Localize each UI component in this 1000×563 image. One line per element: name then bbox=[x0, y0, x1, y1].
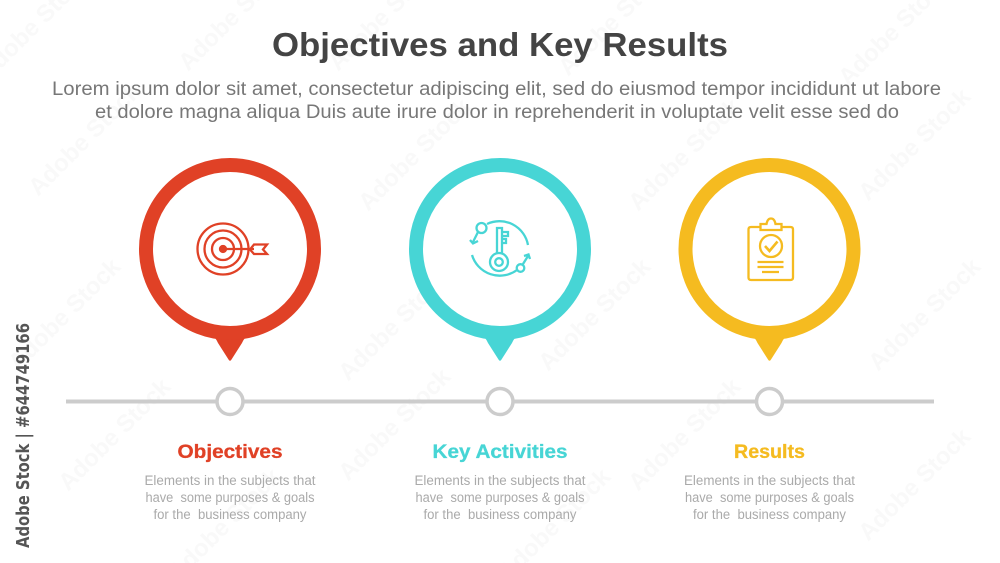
label: objectives: Objectives bbox=[178, 441, 283, 463]
watermark pattern: Adobe Stock bbox=[533, 253, 657, 376]
icon: target with arrow bbox=[198, 224, 267, 274]
watermark pattern: Adobe Stock bbox=[853, 423, 977, 546]
pin: objectives bbox=[146, 165, 314, 361]
label: key activities bbox=[414, 441, 586, 522]
timeline node 1 bbox=[217, 388, 243, 414]
timeline line bbox=[66, 400, 934, 404]
label: results: Elements in the subjects that bbox=[684, 473, 855, 488]
label: objectives bbox=[144, 441, 316, 522]
label: key activities: Elements in the subjects that bbox=[414, 473, 586, 488]
label: results bbox=[684, 441, 855, 522]
label: key activities: Key Activities bbox=[432, 441, 568, 463]
watermark pattern: Adobe Stock bbox=[863, 253, 987, 376]
label: results: have some purposes & goals bbox=[685, 490, 854, 505]
stock id side label: Adobe Stock | #644749166 bbox=[14, 323, 34, 548]
watermark pattern: Adobe Stock bbox=[353, 93, 477, 216]
intro text: et dolore magna aliqua Duis aute irure dolor in reprehenderit in voluptate velit esse sed do bbox=[95, 102, 899, 123]
watermark pattern: Adobe Stock bbox=[3, 253, 127, 376]
pin: key activities bbox=[416, 165, 584, 361]
intro text bbox=[52, 79, 941, 123]
label: objectives: for the business company bbox=[154, 507, 307, 522]
pin: results bbox=[686, 165, 854, 361]
watermark pattern: Adobe Stock bbox=[623, 93, 747, 216]
label: results: Results bbox=[734, 441, 805, 463]
watermark pattern: Adobe Stock bbox=[853, 83, 977, 206]
title: Objectives and Key Results bbox=[272, 26, 728, 63]
label: objectives: Elements in the subjects that bbox=[144, 473, 316, 488]
watermark pattern: Adobe Stock bbox=[23, 78, 147, 201]
label: objectives: have some purposes & goals bbox=[146, 490, 315, 505]
label: results: for the business company bbox=[693, 507, 846, 522]
watermark pattern: Adobe Stock bbox=[333, 363, 457, 486]
watermark pattern: Adobe Stock bbox=[333, 263, 457, 386]
label: key activities: have some purposes & goals bbox=[416, 490, 585, 505]
watermark pattern: Adobe Stock bbox=[623, 373, 747, 496]
icon: clipboard with check bbox=[748, 218, 793, 280]
icon: key with cycle arrows bbox=[470, 221, 530, 276]
label: key activities: for the business company bbox=[424, 507, 577, 522]
intro text: Lorem ipsum dolor sit amet, consectetur adipiscing elit, sed do eiusmod tempor incididunt ut labore bbox=[52, 79, 941, 100]
timeline node 3 bbox=[756, 388, 782, 414]
timeline node 2 bbox=[487, 388, 513, 414]
watermark pattern: Adobe Stock bbox=[53, 373, 177, 496]
